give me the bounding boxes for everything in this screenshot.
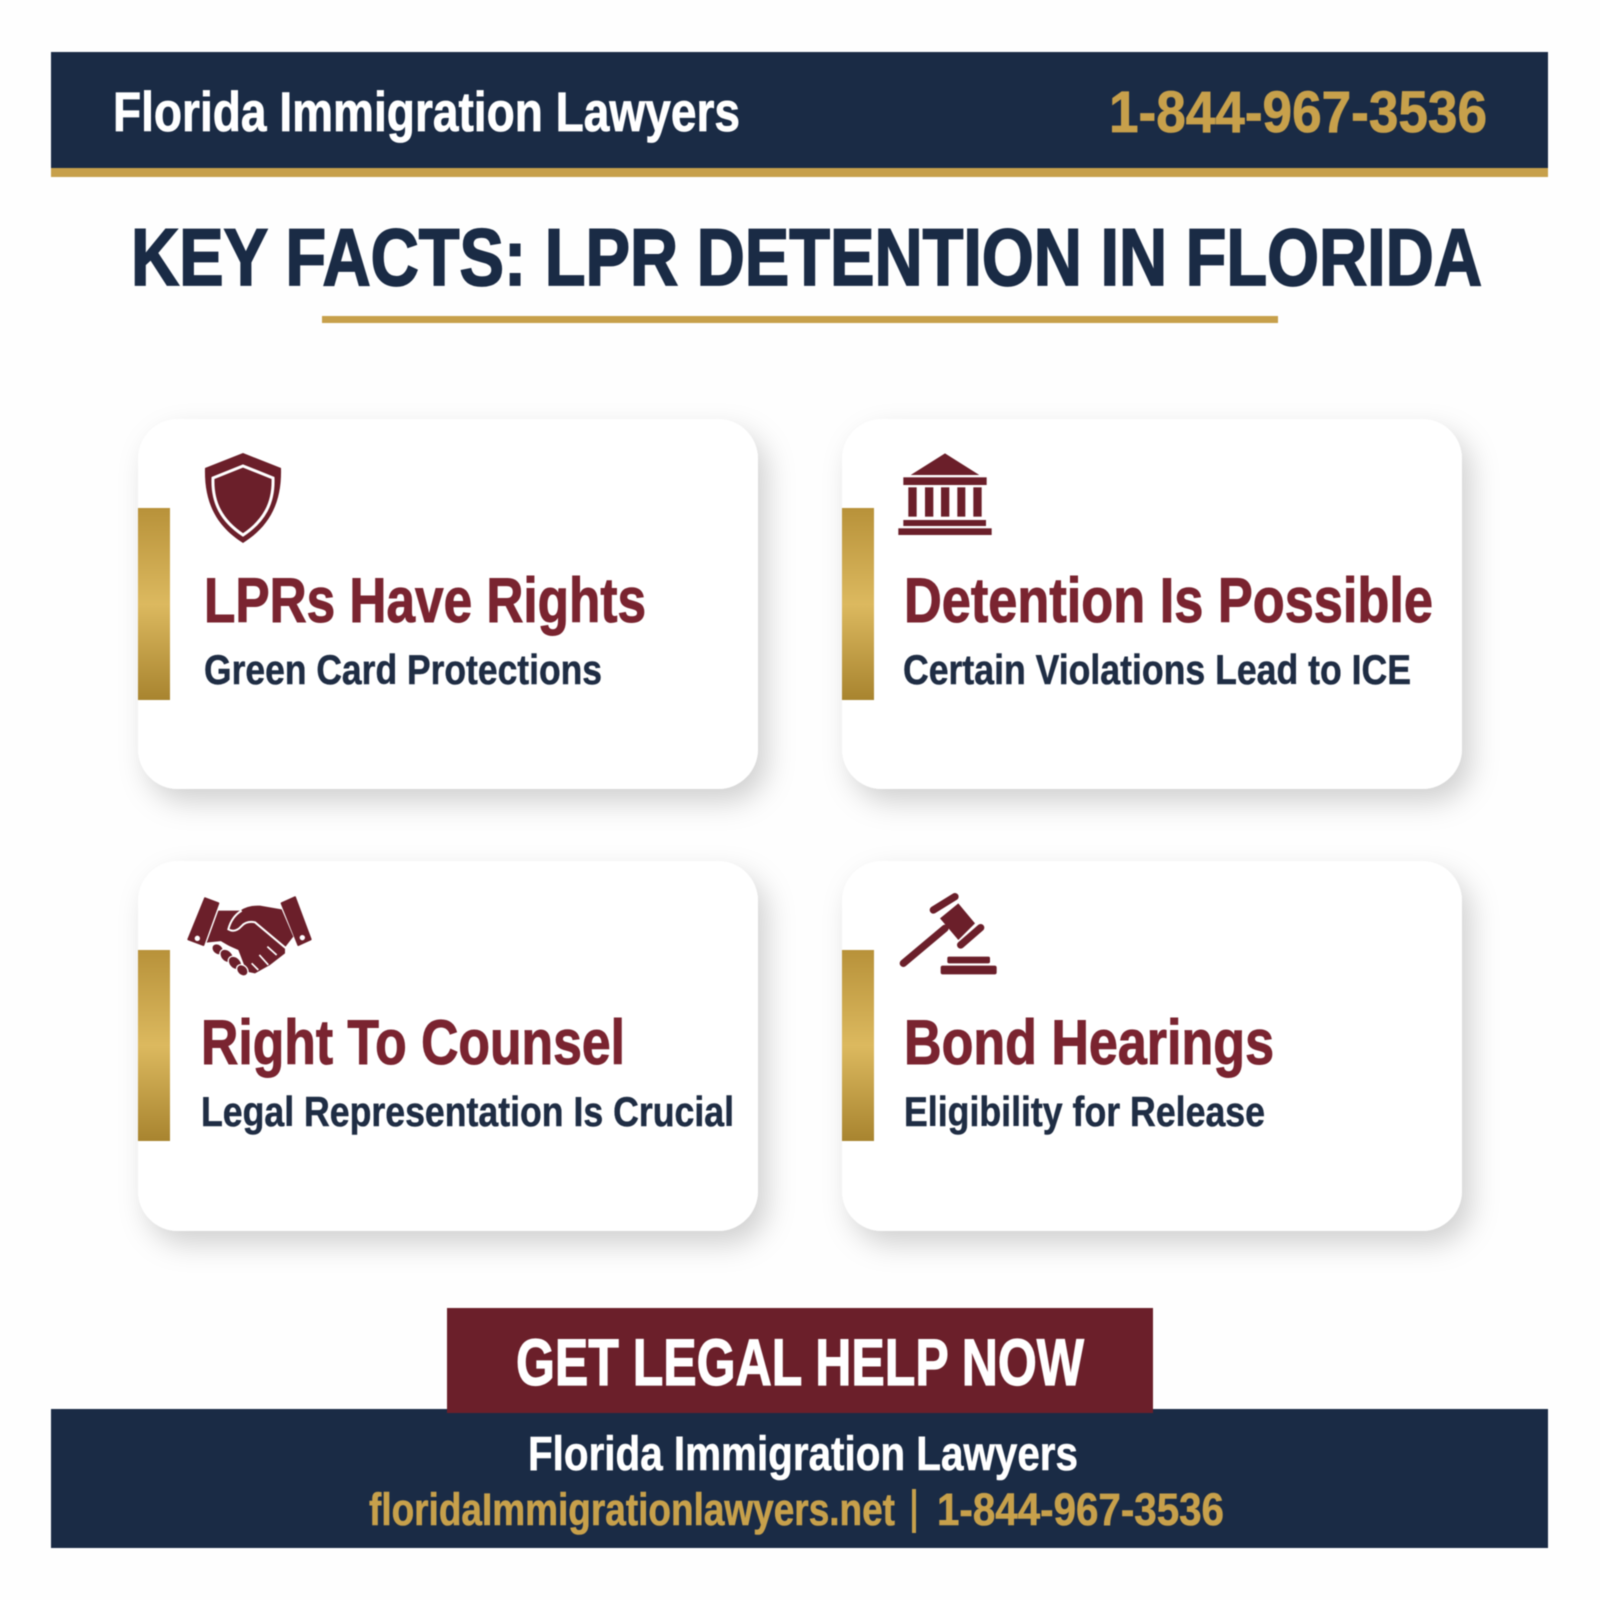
card heading: Bond Hearings	[904, 1008, 1274, 1078]
icon: gavel	[903, 897, 997, 974]
panel: LPRs have rights	[138, 419, 758, 789]
icon: handshake	[188, 897, 311, 978]
footer website: floridaImmigrationlawyers.net	[369, 1484, 895, 1535]
card heading: Detention Is Possible	[904, 566, 1433, 636]
card subheading: Green Card Protections	[204, 646, 602, 693]
call to action button	[447, 1308, 1153, 1413]
icon: shield	[205, 453, 281, 543]
card subheading: Certain Violations Lead to ICE	[903, 646, 1411, 693]
card subheading: Eligibility for Release	[904, 1088, 1265, 1135]
panel: right to counsel	[138, 861, 758, 1231]
header banner	[51, 52, 1548, 177]
call to action button: GET LEGAL HELP NOW	[516, 1325, 1085, 1399]
footer phone number: 1-844-967-3536	[937, 1484, 1224, 1535]
card subheading: Legal Representation Is Crucial	[201, 1088, 734, 1135]
header firm name: Florida Immigration Lawyers	[113, 80, 740, 143]
footer banner	[51, 1409, 1548, 1548]
card heading: Right To Counsel	[201, 1008, 625, 1078]
footer firm name: Florida Immigration Lawyers	[528, 1428, 1078, 1481]
panel: detention is possible	[842, 419, 1462, 789]
header phone number: 1-844-967-3536	[1109, 80, 1487, 145]
icon: courthouse	[898, 453, 992, 535]
card heading: LPRs Have Rights	[204, 566, 646, 636]
panel: bond hearings	[842, 861, 1462, 1231]
